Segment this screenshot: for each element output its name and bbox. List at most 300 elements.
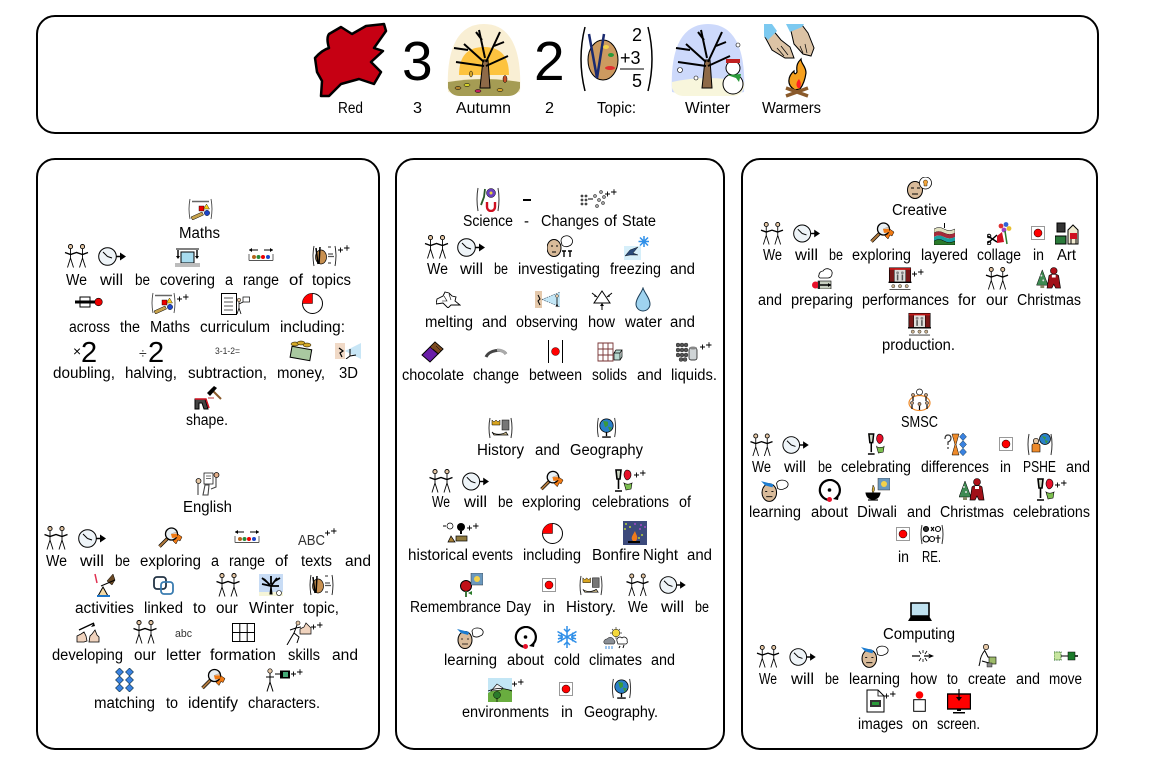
icon: maths (189, 199, 212, 220)
text: We will be investigating freezing and: be (494, 261, 508, 278)
text: melting and observing how water and (425, 314, 695, 331)
text: We will be exploring layered collage in Art: We (763, 247, 782, 264)
text: We will be investigating freezing and: We (427, 261, 448, 278)
icon: computing (908, 603, 932, 621)
icon: across (75, 297, 102, 307)
text: We will be exploring celebrations of: of (679, 494, 692, 511)
text: across the Maths curriculum including: Maths (150, 319, 190, 336)
icon: subtraction sum: 3-1-2= (215, 346, 240, 356)
text: developing our letter formation skills and: our (134, 647, 156, 664)
icon: in (560, 682, 572, 696)
icon: range (249, 248, 273, 260)
heading: History and Geography: and (535, 442, 560, 459)
text: learning about Diwali and Christmas celebrations (749, 504, 1090, 521)
text: environments in Geography: environments (462, 704, 549, 721)
text: We will be learning how to create and move: move (1049, 671, 1082, 688)
text: We will be exploring a range of texts and: a (211, 553, 219, 570)
text: learning about Diwali and Christmas celebrations: and (907, 504, 931, 521)
text: We will be investigating freezing and (427, 261, 695, 278)
text: We will be celebrating differences in PSHE and: and (1066, 459, 1090, 476)
text: images on screen: on (912, 716, 928, 733)
header labels: Warmers (762, 100, 821, 117)
text: doubling halving subtraction money 3D: 3D (339, 365, 358, 382)
text: We will be celebrating differences in PSHE and: We (752, 459, 771, 476)
text: across the Maths curriculum including: curriculum (200, 319, 270, 336)
text: learning about cold climates and: and (651, 652, 675, 669)
icon: activities (95, 574, 115, 596)
icon: we (425, 236, 448, 258)
icon: change (486, 350, 506, 357)
icon: celebrations (1037, 479, 1066, 500)
text: developing our letter formation skills and: and (332, 647, 358, 664)
header digit 2: 2 (534, 30, 565, 92)
icon: creative (908, 177, 932, 198)
icon: will (458, 239, 485, 256)
icon: curriculum (222, 294, 250, 314)
text: chocolate change between solids and liquids: solids (592, 367, 627, 384)
text: We will be learning how to create and move: learning (849, 671, 900, 688)
text: We will be learning how to create and move: to (947, 671, 958, 688)
icon: we (44, 526, 68, 550)
text: matching to identify characters: matching (94, 695, 155, 712)
icon: about (516, 627, 536, 649)
text: activities linked to our Winter topic: Winter (249, 600, 294, 617)
icon: chocolate (422, 342, 443, 362)
text: matching to identify characters (94, 695, 320, 712)
text: activities linked to our Winter topic: to (193, 600, 206, 617)
icon: we (761, 222, 783, 245)
text: melting and observing how water and: melting (425, 314, 473, 331)
icon: science (477, 188, 499, 211)
heading: Computing: Computing (883, 626, 955, 643)
icon: historical events (443, 523, 478, 542)
text: environments in Geography: Geography. (584, 704, 658, 721)
icon: performances (888, 268, 924, 290)
icon: images (867, 690, 896, 712)
text: We will be exploring layered collage in Art (763, 247, 1077, 264)
text: learning about Diwali and Christmas celebrations: about (811, 504, 849, 521)
text: We will be exploring layered collage in Art: will (794, 247, 818, 264)
icon: our (216, 574, 240, 596)
icon: english (196, 472, 219, 495)
text: We will be exploring a range of texts and: exploring (140, 553, 201, 570)
icon: texts (298, 528, 336, 549)
icon: dash (523, 199, 531, 201)
icon: investigating (547, 236, 573, 257)
heading: History and Geography (477, 442, 643, 459)
text: environments in Geography (462, 704, 658, 721)
text: We will be exploring celebrations of (432, 494, 692, 511)
icon: about (820, 480, 840, 502)
text: Remembrance Day in History. We will be (410, 599, 709, 616)
text: We will be exploring layered collage in Art: layered (921, 247, 968, 264)
text: learning about cold climates and (444, 652, 675, 669)
icon: our (134, 620, 156, 644)
text: doubling halving subtraction money 3D: doubling, (53, 365, 115, 382)
icon: times 2: 2 (81, 337, 97, 369)
panel: Creative SMSC and Computing (742, 159, 1097, 749)
icon: matching (116, 668, 134, 692)
icon: SMSC (909, 389, 930, 410)
icon: divide 2: ÷ (139, 345, 147, 361)
header labels: Winter (685, 100, 730, 117)
text: chocolate change between solids and liquids (402, 367, 717, 384)
icon: warm hands over fire (764, 24, 814, 96)
icon: differences (945, 433, 966, 456)
heading: Science - Changes of State: of (604, 213, 618, 230)
icon: diwali (866, 478, 890, 500)
text: We will be exploring celebrations of: will (463, 494, 487, 511)
text: We will be covering a range of topics: of (289, 272, 304, 289)
icon: exploring (541, 471, 563, 489)
icon: remembrance day (460, 573, 483, 597)
text: We will be exploring celebrations of: We (432, 494, 450, 511)
text: We will be covering a range of topics: range (243, 272, 279, 289)
text: We will be investigating freezing and: and (670, 261, 695, 278)
heading: Science - Changes of State: - (524, 213, 529, 230)
text: matching to identify characters: identify (188, 695, 238, 712)
text: melting and observing how water and: observing (516, 314, 578, 331)
text: chocolate change between solids and liquids: change (473, 367, 519, 384)
icon: will (99, 248, 126, 265)
icon: RE (921, 525, 943, 544)
text: We will be celebrating differences in PSHE and: PSHE (1023, 459, 1056, 476)
text: doubling halving subtraction money 3D (53, 365, 358, 382)
text: We will be investigating freezing and: investigating (518, 261, 600, 278)
text: in RE: RE. (922, 549, 941, 566)
text: We will be exploring a range of texts and: of (275, 553, 289, 570)
text: melting and observing how water and: water (624, 314, 662, 331)
text: learning about Diwali and Christmas celebrations: celebrations (1013, 504, 1090, 521)
text: shape: shape. (186, 412, 228, 429)
text: developing our letter formation skills and: letter (166, 647, 201, 664)
text: historical events including Bonfire Night and: and (687, 547, 712, 564)
icon: characters (266, 669, 302, 692)
text: historical events including Bonfire Night and: Bonfire (592, 547, 640, 564)
icon: screen (948, 689, 970, 714)
header labels: Topic: (597, 100, 636, 117)
text: learning about Diwali and Christmas celebrations: Christmas (940, 504, 1004, 521)
icon: create (979, 644, 996, 667)
icon: will (794, 225, 820, 242)
icon: liquids (676, 342, 712, 362)
icon: christmas (1037, 267, 1060, 288)
text: learning about Diwali and Christmas celebrations: Diwali (857, 504, 897, 521)
icon: in (896, 528, 910, 540)
icon: move (1054, 652, 1078, 660)
text: Remembrance Day in History. We will be: will (660, 599, 684, 616)
icon: christmas (959, 478, 984, 500)
text: images on screen: screen. (937, 716, 980, 733)
text: We will be investigating freezing and: will (459, 261, 483, 278)
icon: in (1000, 438, 1012, 450)
heading: History and Geography: Geography (570, 442, 643, 459)
icon: will (79, 530, 106, 547)
text: We will be learning how to create and move: be (825, 671, 839, 688)
icon: will (660, 577, 686, 593)
heading: Science - Changes of State: Science (463, 213, 513, 230)
icon: we (65, 244, 88, 268)
text: We will be exploring a range of texts and (46, 553, 371, 570)
icon: between (548, 340, 562, 363)
icon: topic palette and sum: +3 (620, 48, 641, 68)
text: historical events including Bonfire Night and: events (472, 547, 513, 564)
text: developing our letter formation skills and: skills (288, 647, 320, 664)
text: We will be covering a range of topics: will (99, 272, 123, 289)
text: We will be learning how to create and move: and (1016, 671, 1040, 688)
icon: winter tree and snowman (672, 24, 744, 96)
text: We will be celebrating differences in PSHE and (752, 459, 1090, 476)
text: We will be learning how to create and move: how (910, 671, 938, 688)
text: melting and observing how water and: and (670, 314, 695, 331)
text: and preparing performances for our Christmas: our (986, 292, 1008, 309)
text: We will be celebrating differences in PSHE and: be (818, 459, 832, 476)
text: We will be covering a range of topics: be (135, 272, 150, 289)
text: production: production. (882, 337, 955, 354)
icon: cold (558, 626, 576, 648)
icon: texts: ABC (298, 532, 325, 549)
text: across the Maths curriculum including: including: (280, 319, 345, 336)
text: developing our letter formation skills and (52, 647, 358, 664)
header labels: 2 (545, 100, 554, 117)
text: We will be exploring a range of texts and: range (229, 553, 265, 570)
icon: we (430, 470, 452, 492)
icon: will (783, 437, 809, 453)
text: We will be learning how to create and move: We (759, 671, 777, 688)
icon: how (912, 650, 934, 662)
icon: preparing (812, 269, 832, 289)
icon: maths plural (152, 293, 188, 314)
text: We will be learning how to create and move: create (968, 671, 1006, 688)
text: historical events including Bonfire Night and (408, 547, 712, 564)
icon: art (1055, 223, 1078, 244)
icon: will (463, 473, 489, 490)
text: We will be learning how to create and move: will (790, 671, 814, 688)
icon: covering (175, 249, 200, 267)
text: We will be celebrating differences in PSHE and: in (1000, 459, 1011, 476)
icon: identify (202, 670, 225, 688)
text: matching to identify characters: to (166, 695, 178, 712)
icon: water (636, 288, 650, 311)
text: developing our letter formation skills and: formation (210, 647, 276, 664)
icon: times 2: × (73, 343, 81, 359)
text: chocolate change between solids and liquids: between (529, 367, 582, 384)
icon: production (908, 313, 931, 335)
text: activities linked to our Winter topic: linked (144, 600, 183, 617)
text: We will be exploring a range of texts and: We (46, 553, 67, 570)
text: We will be investigating freezing and: freezing (610, 261, 661, 278)
heading: English: English (183, 499, 232, 516)
text: We will be exploring a range of texts and: texts (301, 553, 332, 570)
header labels: 3 (413, 100, 422, 117)
icon: on (914, 691, 925, 711)
icon: including (302, 294, 322, 314)
text: chocolate change between solids and liquids: chocolate (402, 367, 464, 384)
icon: PSHE (1028, 434, 1052, 455)
icon: exploring (160, 528, 182, 546)
text: We will be exploring layered collage in Art: Art (1057, 247, 1077, 264)
icon: layered (934, 223, 955, 245)
text: and preparing performances for our Christmas: for (958, 292, 976, 309)
text: melting and observing how water and: and (482, 314, 507, 331)
icon: celebrating (868, 434, 884, 454)
text: and preparing performances for our Christmas (758, 292, 1081, 309)
heading: Creative: Creative (892, 202, 947, 219)
icon: we (750, 434, 773, 456)
icon: 3D (335, 343, 361, 359)
panel: header (37, 16, 1098, 133)
text: We will be exploring layered collage in Art: exploring (852, 247, 911, 264)
icon: developing (77, 623, 99, 642)
icon: formation grid (232, 624, 254, 642)
header labels: Red (338, 100, 363, 117)
text: learning about cold climates and: climates (589, 652, 642, 669)
icon: solids (598, 343, 622, 361)
text: in RE: in (898, 549, 909, 566)
text: We will be exploring layered collage in Art: collage (977, 247, 1021, 264)
text: across the Maths curriculum including: across (69, 319, 110, 336)
text: We will be covering a range of topics: covering (160, 272, 215, 289)
text: chocolate change between solids and liquids: and (637, 367, 662, 384)
text: matching to identify characters: characters. (248, 695, 320, 712)
icon: we (626, 574, 649, 596)
icon: winter (259, 574, 283, 596)
text: activities linked to our Winter topic: our (216, 600, 238, 617)
icon: autumn tree (448, 24, 520, 96)
icon: letter: abc (175, 628, 192, 640)
text: images on screen (858, 716, 980, 733)
text: Remembrance Day in History. We will be: We (628, 599, 648, 616)
header labels (338, 100, 821, 117)
text: Remembrance Day in History. We will be: in (543, 599, 555, 616)
text: across the Maths curriculum including (69, 319, 345, 336)
text: We will be covering a range of topics (66, 272, 351, 289)
icon: bonfire night (623, 521, 647, 545)
text: doubling halving subtraction money 3D: halving, (125, 365, 177, 382)
icon: history (580, 576, 602, 595)
icon: money (290, 341, 312, 361)
text: historical events including Bonfire Night and: including (523, 547, 581, 564)
icon: times 2 (73, 337, 97, 369)
icon: divide 2 (139, 337, 164, 369)
header digit 3: 3 (402, 30, 433, 92)
text: environments in Geography: in (561, 704, 573, 721)
heading: Science - Changes of State (463, 213, 656, 230)
icon: geography (597, 418, 616, 437)
icon: topic palette and sum: 2 (632, 25, 642, 45)
icon: we (757, 645, 779, 668)
text: We will be celebrating differences in PSHE and: will (783, 459, 806, 476)
text: images on screen: images (858, 716, 903, 733)
text: We will be celebrating differences in PSHE and: differences (921, 459, 989, 476)
text: doubling halving subtraction money 3D: money, (277, 365, 325, 382)
icon: topic palette and sum: 5 (632, 71, 642, 91)
icon: topic (310, 575, 333, 595)
text: learning about Diwali and Christmas celebrations: learning (749, 504, 801, 521)
text: We will be exploring celebrations of: exploring (522, 494, 581, 511)
text: activities linked to our Winter topic (75, 600, 339, 617)
icon: exploring (872, 223, 894, 242)
text: melting and observing how water and: how (588, 314, 616, 331)
text: We will be covering a range of topics: We (66, 272, 87, 289)
icon: will (790, 649, 816, 665)
text: Remembrance Day in History. We will be: be (695, 599, 709, 616)
icon: melting (436, 292, 460, 308)
icon: skills (287, 621, 322, 645)
icon: our (986, 267, 1008, 290)
text: across the Maths curriculum including: the (120, 319, 140, 336)
text: learning about cold climates and: about (507, 652, 545, 669)
icon: learning (761, 480, 788, 501)
text: and preparing performances for our Christmas: and (758, 292, 782, 309)
heading: History and Geography: History (477, 442, 524, 459)
icon: range (235, 530, 259, 542)
text: We will be exploring layered collage in Art: in (1033, 247, 1044, 264)
icon: how (592, 291, 612, 310)
text: We will be exploring layered collage in Art: be (829, 247, 843, 264)
text: We will be exploring a range of texts and: and (345, 553, 371, 570)
text: Remembrance Day in History. We will be: Remembrance (410, 599, 501, 616)
text: and preparing performances for our Christmas: performances (862, 292, 949, 309)
text: doubling halving subtraction money 3D: subtraction, (188, 365, 267, 382)
header labels: Autumn (456, 100, 511, 117)
heading: Science - Changes of State: State (622, 213, 656, 230)
heading: SMSC: SMSC (901, 414, 938, 431)
icon: celebrations (615, 470, 646, 491)
text: chocolate change between solids and liquids: liquids. (671, 367, 717, 384)
icon: shape (195, 386, 221, 409)
text: in RE (898, 549, 941, 566)
text: We will be covering a range of topics: topics (312, 272, 351, 289)
text: Remembrance Day in History. We will be: History. (566, 599, 616, 616)
text: developing our letter formation skills and: developing (52, 647, 123, 664)
icon: history (489, 418, 512, 438)
icon: topics (313, 245, 350, 266)
icon: learning (457, 628, 483, 648)
text: We will be covering a range of topics: a (225, 272, 233, 289)
text: We will be exploring a range of texts and: will (79, 553, 104, 570)
text: activities linked to our Winter topic: activities (75, 600, 134, 617)
text: Remembrance Day in History. We will be: Day (506, 599, 531, 616)
text: and preparing performances for our Christmas: preparing (791, 292, 853, 309)
icon: learning (861, 646, 888, 667)
text: activities linked to our Winter topic: topic, (303, 600, 339, 617)
text: and preparing performances for our Christmas: Christmas (1017, 292, 1081, 309)
icon: collage (987, 222, 1011, 245)
text: learning about cold climates and: learning (444, 652, 497, 669)
text: We will be celebrating differences in PSHE and: celebrating (841, 459, 911, 476)
text: We will be exploring celebrations of: be (498, 494, 513, 511)
icon: topic palette and sum (581, 25, 652, 91)
icon: divide 2: 2 (148, 337, 164, 369)
heading: Science - Changes of State: Changes (541, 213, 599, 230)
icon: including (542, 524, 562, 544)
text: historical events including Bonfire Night and: Night (643, 547, 679, 564)
heading: Maths: Maths (179, 225, 220, 242)
text: learning about cold climates and: cold (554, 652, 580, 669)
panel: Maths and English (37, 159, 379, 749)
icon: observing (535, 291, 560, 308)
icon: linked (154, 577, 173, 594)
icon: freezing (624, 236, 650, 260)
text: We will be learning how to create and move (759, 671, 1082, 688)
panel: Science and History and Geography (396, 159, 724, 749)
icon: geography (612, 679, 631, 698)
text: We will be exploring a range of texts and: be (115, 553, 130, 570)
icon: in (1032, 226, 1044, 240)
text: historical events including Bonfire Night and: historical (408, 547, 468, 564)
text: We will be exploring celebrations of: celebrations (592, 494, 669, 511)
